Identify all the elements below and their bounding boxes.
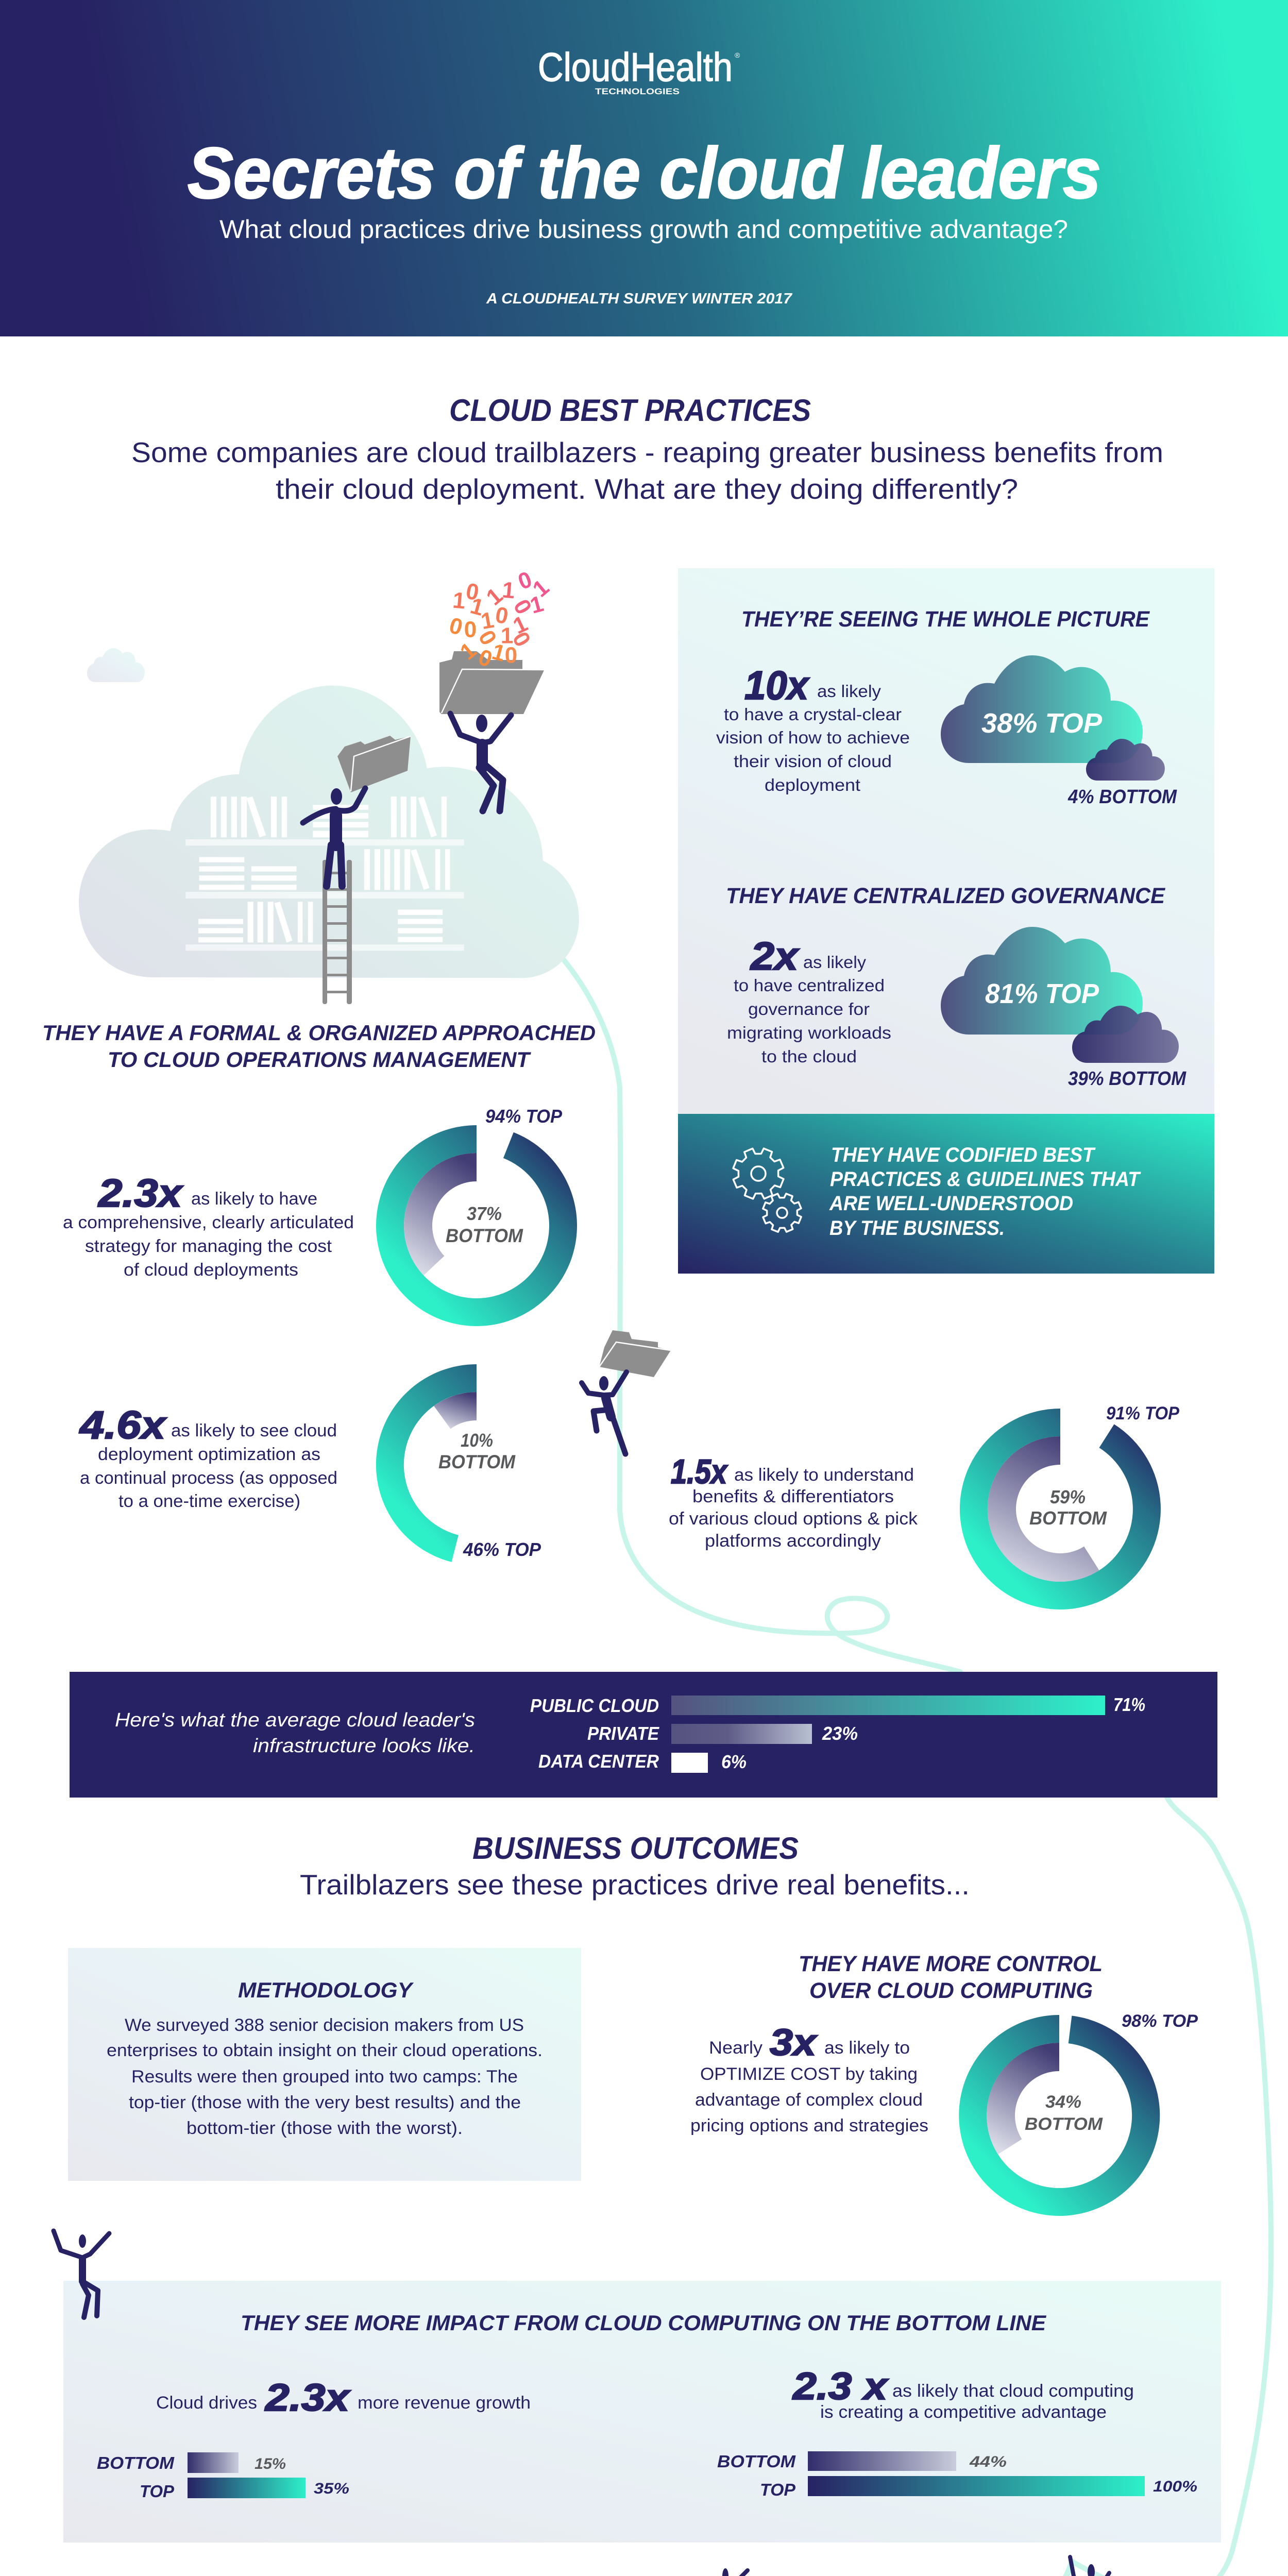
stat: 10x: to have a crystal-clear xyxy=(724,705,902,724)
binary digits: 0 xyxy=(509,595,536,619)
panel: methodology: METHODOLOGY xyxy=(238,1978,414,2002)
stat: 2.3x cost strategy: a comprehensive, clearly articulated xyxy=(63,1213,354,1232)
icon: gears xyxy=(725,1141,807,1238)
stat: 2x xyxy=(727,935,891,1066)
stat: nearly 3x optimize cost: OPTIMIZE COST by taking xyxy=(700,2064,918,2084)
cloud chart: 81% top, 39% bottom: 39% BOTTOM xyxy=(1068,1068,1187,1090)
floating figure xyxy=(450,714,511,811)
stat: nearly 3x optimize cost: as likely to xyxy=(824,2038,910,2058)
stat: 2x: migrating workloads xyxy=(727,1023,891,1042)
codified text: PRACTICES & GUIDELINES THAT xyxy=(830,1168,1141,1191)
bar chart: competitive advantage: BOTTOM xyxy=(717,2452,796,2471)
binary digits: 1 xyxy=(489,639,508,667)
stat: 10x: deployment xyxy=(765,775,860,794)
panel: codified best practices xyxy=(678,1114,1214,1274)
stat: 1.5x cloud options: of various cloud options & pick xyxy=(669,1509,918,1529)
survey tag: A CLOUDHEALTH SURVEY WINTER 2017 xyxy=(486,291,793,307)
stat: 4.6x continual optimization: as likely to see cloud xyxy=(171,1421,337,1440)
donut chart: 98% top, 34% bottom: 34% xyxy=(1045,2092,1081,2112)
donut chart: 98% top, 34% bottom: 98% TOP xyxy=(1122,2011,1198,2031)
bar chart: revenue growth: BOTTOM xyxy=(97,2453,175,2472)
icon: small cloud xyxy=(87,648,145,682)
bar chart: competitive advantage: TOP xyxy=(760,2480,796,2499)
stat: 2.3x cost strategy: of cloud deployments xyxy=(124,1260,298,1280)
stat: 1.5x cloud options: benefits & differentiators xyxy=(692,1487,894,1506)
heading: formal and organized approach xyxy=(42,1021,596,1072)
stat: 2x: 2x xyxy=(750,935,800,978)
heading: impact on the bottom line: THEY SEE MORE IMPACT FROM CLOUD COMPUTING ON THE BOTTOM LINE xyxy=(241,2311,1047,2335)
bar chart: competitive advantage: 44% xyxy=(969,2453,1007,2470)
cloud chart: 38% top, 4% bottom: 4% BOTTOM xyxy=(1067,786,1177,808)
binary digits: 0 xyxy=(507,628,535,651)
stat: 2x: as likely xyxy=(803,953,867,972)
stat: 2.3x cost strategy: as likely to have xyxy=(191,1189,317,1209)
section heading: cloud best practices: their cloud deployment. What are they doing differently? xyxy=(276,473,1018,505)
bar chart: revenue growth: TOP xyxy=(140,2482,175,2501)
binary digits: 0 xyxy=(464,579,481,605)
stat: nearly 3x optimize cost: Nearly xyxy=(709,2038,762,2058)
logo: CloudHealth Technologies: TECHNOLOGIES xyxy=(595,87,680,96)
binary digits: 1 xyxy=(452,588,466,614)
section heading: cloud best practices: Some companies are cloud trailblazers - reaping greater business benefits from xyxy=(131,436,1163,468)
stat: 2.3x cost strategy xyxy=(63,1172,354,1280)
methodology text: Results were then grouped into two camps: The xyxy=(131,2067,518,2087)
stat: 1.5x cloud options: 1.5x xyxy=(671,1452,728,1490)
cloud chart: 81% top, 39% bottom: 81% TOP xyxy=(985,978,1099,1009)
stat: 2.3x cost strategy: 2.3x xyxy=(97,1172,183,1215)
section heading: cloud best practices xyxy=(131,393,1163,505)
rope / USB cable line xyxy=(562,957,1271,2576)
donut chart: 46% top, 10% bottom: BOTTOM xyxy=(438,1451,516,1472)
codified text: THEY HAVE CODIFIED BEST xyxy=(831,1144,1096,1166)
folder held by ladder figure xyxy=(337,736,411,792)
stat: 4.6x continual optimization: to a one-time exercise) xyxy=(118,1492,300,1511)
stat: 2x: to the cloud xyxy=(761,1047,857,1066)
donut chart: 91% top, 59% bottom xyxy=(960,1403,1180,1609)
binary digits: 0 xyxy=(505,643,517,668)
binary digits: 0 xyxy=(475,645,496,672)
heading: formal and organized approach: THEY HAVE A FORMAL & ORGANIZED APPROACHED xyxy=(42,1021,596,1045)
section heading: cloud best practices: CLOUD BEST PRACTICES xyxy=(449,393,811,428)
stat: 2.3x competitive advantage: 2.3 x xyxy=(792,2365,889,2408)
binary digits: 0 xyxy=(494,602,510,629)
panel: whole picture and governance xyxy=(678,568,1214,1114)
stat: 10x: their vision of cloud xyxy=(734,752,892,771)
stat: 10x xyxy=(716,663,910,794)
binary digits xyxy=(447,567,554,672)
stat: 2x: governance for xyxy=(748,999,870,1019)
infrastructure caption xyxy=(115,1709,475,1757)
binary digits: 1 xyxy=(468,593,486,621)
bar: public cloud 71%: PUBLIC CLOUD xyxy=(530,1695,659,1716)
stat: 2.3x revenue growth: more revenue growth xyxy=(358,2393,531,2413)
subtitle: What cloud practices drive business growth and competitive advantage? xyxy=(219,215,1068,244)
stat: 1.5x cloud options: as likely to understand xyxy=(734,1465,914,1485)
binary digits: 0 xyxy=(515,567,535,595)
bar: public cloud 71% xyxy=(530,1694,1145,1716)
figure on ladder xyxy=(303,788,365,886)
methodology text: top-tier (those with the very best results) and the xyxy=(129,2093,521,2112)
stat: 10x: 10x xyxy=(744,663,810,708)
cloud chart: 38% top, 4% bottom xyxy=(941,655,1177,808)
bar: private 23% xyxy=(587,1723,858,1744)
donut chart: 91% top, 59% bottom: 91% TOP xyxy=(1106,1403,1180,1423)
stat: 4.6x continual optimization xyxy=(79,1403,337,1511)
donut chart: 98% top, 34% bottom xyxy=(959,2011,1198,2216)
bar: data center 6%: DATA CENTER xyxy=(538,1751,659,1772)
stat: 4.6x continual optimization: a continual process (as opposed xyxy=(80,1468,337,1488)
panel: bottom line impact xyxy=(63,2281,1221,2543)
stat: 2.3x revenue growth xyxy=(156,2376,531,2419)
methodology text: We surveyed 388 senior decision makers from US xyxy=(125,2015,524,2035)
stat: 4.6x continual optimization: 4.6x xyxy=(79,1403,167,1447)
bar chart: revenue growth xyxy=(97,2452,349,2501)
donut chart: 91% top, 59% bottom: BOTTOM xyxy=(1029,1507,1107,1529)
bar chart: competitive advantage: 100% xyxy=(1153,2478,1197,2495)
codified text: BY THE BUSINESS. xyxy=(829,1217,1005,1240)
logo: CloudHealth Technologies: CloudHealth xyxy=(538,44,733,90)
methodology text: bottom-tier (those with the worst). xyxy=(187,2119,463,2138)
stat: 2.3x revenue growth: 2.3x xyxy=(264,2376,351,2419)
stat: nearly 3x optimize cost: advantage of complex cloud xyxy=(695,2090,923,2110)
donut chart: 98% top, 34% bottom: BOTTOM xyxy=(1025,2114,1103,2134)
bar: data center 6% xyxy=(538,1751,747,1773)
stat: 1.5x cloud options xyxy=(669,1452,918,1551)
donut chart: 94% top, 37% bottom: 37% xyxy=(467,1203,502,1224)
methodology text: enterprises to obtain insight on their cloud operations. xyxy=(107,2041,543,2060)
binary digits: 1 xyxy=(479,607,496,634)
stat: 4.6x continual optimization: deployment optimization as xyxy=(98,1445,320,1464)
donut chart: 91% top, 59% bottom: 59% xyxy=(1050,1486,1086,1507)
figure with arms raised at panel edge xyxy=(54,2231,109,2317)
bar chart: revenue growth: 15% xyxy=(255,2455,286,2472)
header banner xyxy=(0,0,1288,336)
panel: methodology xyxy=(68,1948,581,2181)
bar: public cloud 71%: 71% xyxy=(1113,1694,1145,1715)
heading: formal and organized approach: TO CLOUD OPERATIONS MANAGEMENT xyxy=(108,1047,531,1072)
bar chart: revenue growth: 35% xyxy=(314,2480,349,2497)
donut chart: 46% top, 10% bottom: 10% xyxy=(461,1430,493,1451)
binary digits: 1 xyxy=(528,574,554,602)
heading: more control over cloud computing xyxy=(799,1952,1103,2003)
binary digits: 1 xyxy=(455,637,481,665)
binary digits: 1 xyxy=(528,591,546,619)
big cloud xyxy=(79,686,579,978)
stat: 2.3x cost strategy: strategy for managing the cost xyxy=(85,1236,332,1256)
stat: 10x: vision of how to achieve xyxy=(716,728,910,747)
figure celebrating with cable xyxy=(1056,2557,1109,2576)
stat: 1.5x cloud options: platforms accordingly xyxy=(705,1531,881,1551)
stat: nearly 3x optimize cost: 3x xyxy=(770,2022,818,2063)
section heading: business outcomes xyxy=(300,1831,970,1901)
section heading: business outcomes: BUSINESS OUTCOMES xyxy=(472,1831,799,1866)
bar: data center 6%: 6% xyxy=(721,1751,747,1772)
donut chart: 46% top, 10% bottom xyxy=(376,1364,541,1562)
figure climbing rope with folder xyxy=(582,1330,671,1454)
main title: Secrets of the cloud leaders xyxy=(188,132,1101,213)
binary digits: 0 xyxy=(473,626,501,650)
stat: 2.3x revenue growth: Cloud drives xyxy=(156,2393,257,2413)
stat: 2.3x competitive advantage xyxy=(792,2365,1134,2422)
stat: 10x: as likely xyxy=(817,682,882,701)
methodology text xyxy=(107,2015,543,2138)
section heading: business outcomes: Trailblazers see these practices drive real benefits... xyxy=(300,1869,970,1901)
ladder xyxy=(323,860,352,1004)
stat: nearly 3x optimize cost: pricing options and strategies xyxy=(690,2116,928,2136)
bar chart: competitive advantage xyxy=(717,2451,1197,2499)
heading: centralized governance: THEY HAVE CENTRALIZED GOVERNANCE xyxy=(726,884,1165,908)
figure carrying ladder xyxy=(671,2568,768,2576)
infrastructure caption: Here's what the average cloud leader's xyxy=(115,1709,475,1731)
stat: 2x: to have centralized xyxy=(734,976,885,995)
cloud chart: 81% top, 39% bottom xyxy=(941,927,1187,1090)
codified text xyxy=(829,1144,1141,1240)
heading: more control over cloud computing: OVER CLOUD COMPUTING xyxy=(809,1978,1093,2003)
infrastructure caption: infrastructure looks like. xyxy=(253,1735,475,1757)
stat: 2.3x competitive advantage: as likely that cloud computing xyxy=(892,2381,1134,2401)
donut chart: 46% top, 10% bottom: 46% TOP xyxy=(463,1539,541,1560)
binary digits: 0 xyxy=(447,613,465,640)
binary digits: 1 xyxy=(482,583,507,611)
heading: more control over cloud computing: THEY HAVE MORE CONTROL xyxy=(799,1952,1103,1976)
bookshelves xyxy=(185,796,464,951)
binary digits: 0 xyxy=(464,617,477,642)
illustration: cloud library with climbers xyxy=(79,567,579,1004)
stat: 2.3x competitive advantage: is creating a competitive advantage xyxy=(820,2402,1107,2422)
donut chart: 94% top, 37% bottom xyxy=(376,1106,577,1326)
bar: private 23%: 23% xyxy=(822,1723,858,1744)
bar: private 23%: PRIVATE xyxy=(587,1723,659,1744)
donut chart: 94% top, 37% bottom: BOTTOM xyxy=(446,1225,523,1246)
logo: CloudHealth Technologies: ® xyxy=(735,51,740,59)
binary digits: 1 xyxy=(501,623,513,648)
panel: infrastructure mix bar chart xyxy=(70,1672,1217,1798)
folder held overhead xyxy=(439,651,544,714)
binary digits: 1 xyxy=(510,611,531,639)
donut chart: 94% top, 37% bottom: 94% TOP xyxy=(485,1106,563,1127)
codified text: ARE WELL-UNDERSTOOD xyxy=(829,1192,1073,1215)
binary digits: 1 xyxy=(501,578,516,603)
heading: seeing the whole picture: THEY’RE SEEING THE WHOLE PICTURE xyxy=(741,607,1150,632)
stat: nearly 3x optimize cost xyxy=(690,2022,928,2136)
cloud chart: 38% top, 4% bottom: 38% TOP xyxy=(981,708,1103,739)
